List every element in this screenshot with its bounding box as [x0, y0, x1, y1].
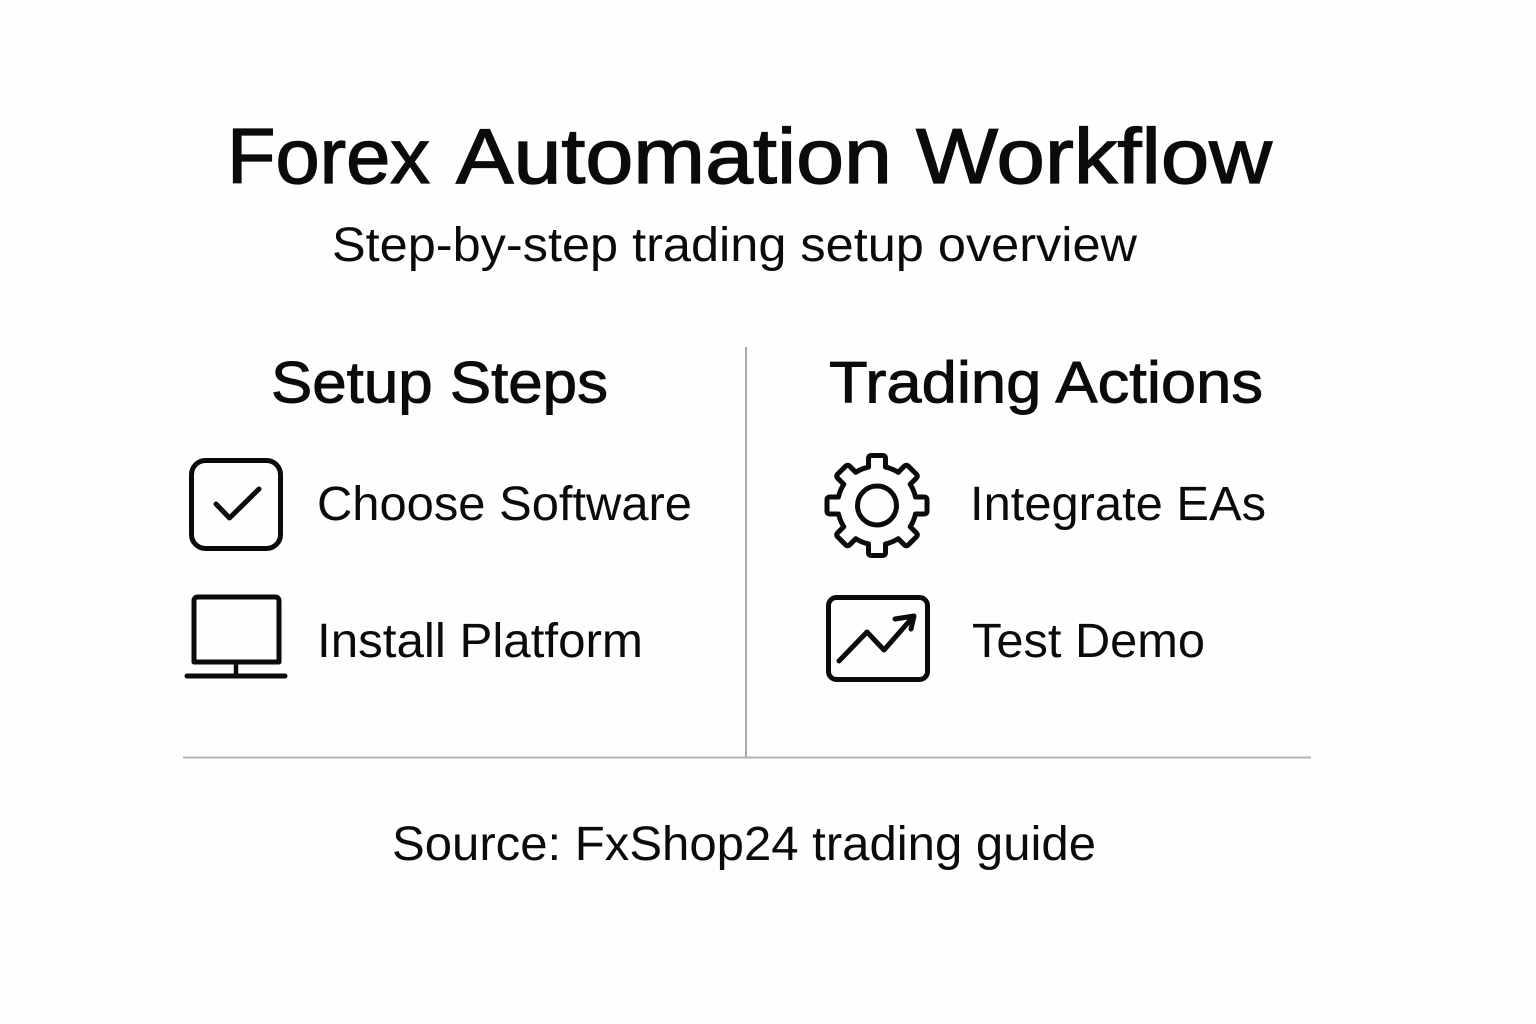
- icon: laptop: [187, 597, 285, 676]
- title: Automation: [456, 112, 892, 200]
- icon: checkbox: [192, 460, 280, 548]
- icon: chart: [828, 598, 928, 680]
- label: test demo: Test Demo: [972, 615, 1205, 668]
- vertical divider: [745, 347, 747, 758]
- source note: Source: FxShop24 trading guide: [392, 818, 1096, 871]
- icon: gear: [827, 456, 927, 556]
- label: integrate EAs: Integrate EAs: [970, 478, 1266, 531]
- title: Workflow: [916, 112, 1273, 200]
- panel: trading actions: [827, 350, 1266, 680]
- heading: setup steps: Setup Steps: [271, 350, 608, 416]
- heading: trading actions: Trading Actions: [829, 350, 1263, 416]
- title: Forex: [227, 112, 430, 200]
- panel: setup steps: [187, 350, 692, 676]
- label: choose software: Choose Software: [317, 478, 692, 531]
- title: [227, 112, 1273, 200]
- label: install platform: Install Platform: [317, 615, 643, 668]
- subtitle: Step-by-step trading setup overview: [332, 219, 1137, 272]
- horizontal divider: [183, 756, 1311, 758]
